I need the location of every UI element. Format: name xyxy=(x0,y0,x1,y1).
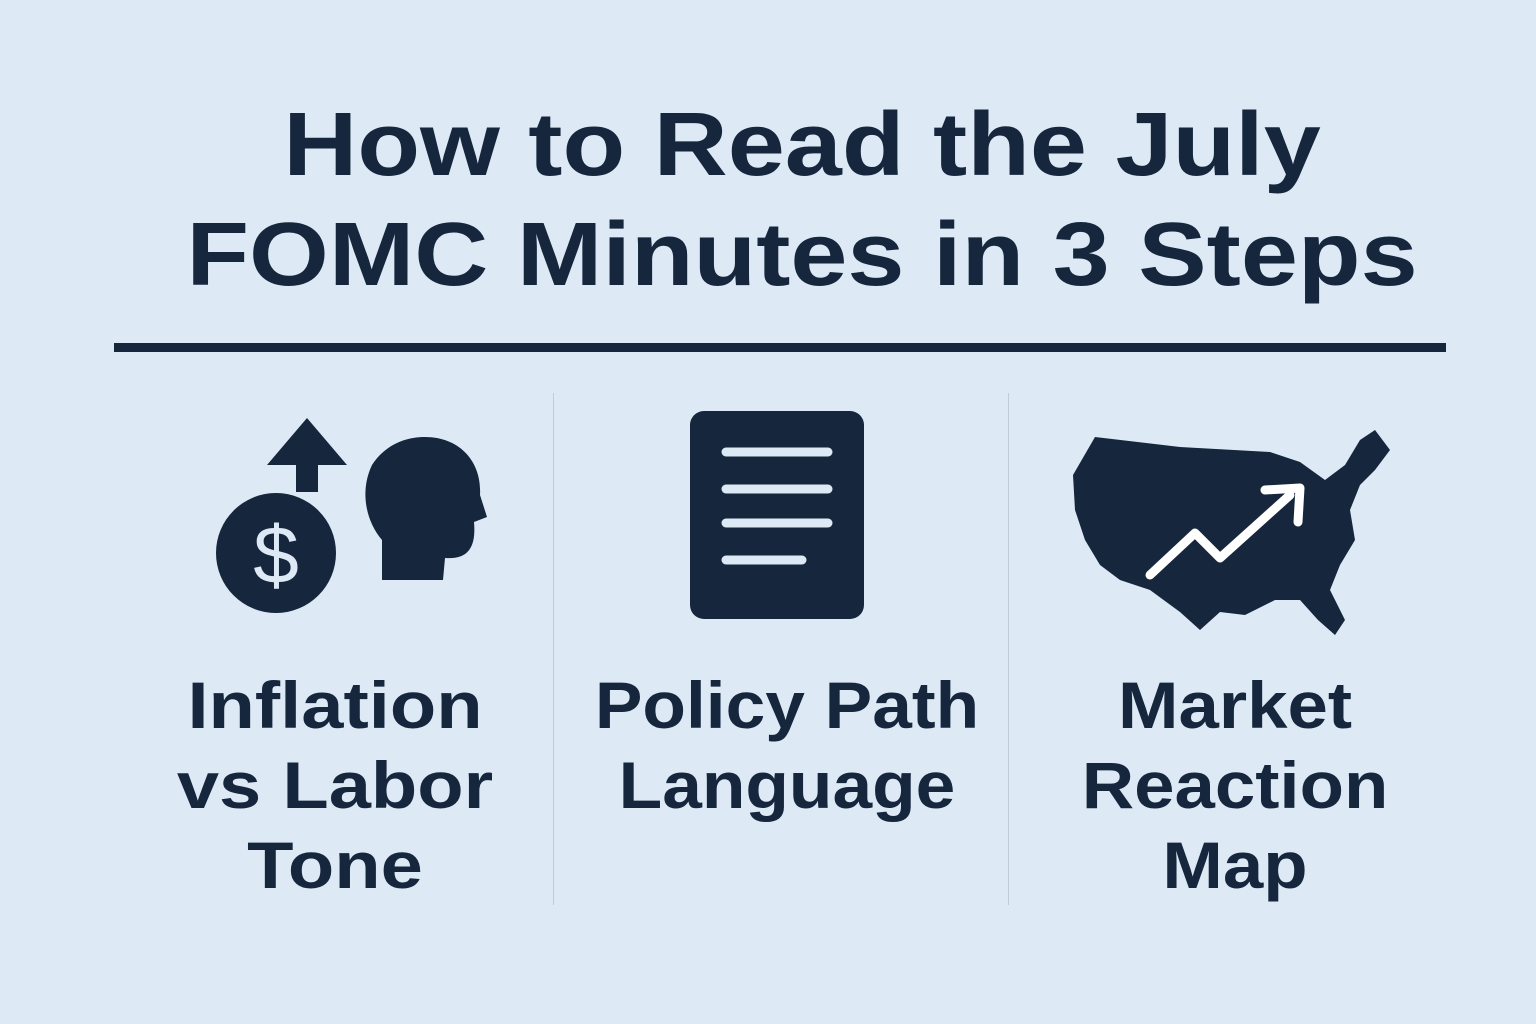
icon: dollar coin, up arrow and head: $ xyxy=(253,510,299,601)
label: Inflation xyxy=(187,668,483,742)
icon: US map with trend arrow xyxy=(1073,430,1390,635)
panel: step 3 xyxy=(1073,430,1390,902)
label: Reaction xyxy=(1082,748,1388,822)
label: vs Labor xyxy=(177,748,493,822)
icon: document xyxy=(690,411,864,619)
panel: step 2 xyxy=(595,411,979,822)
title xyxy=(186,95,1418,305)
label: Market xyxy=(1118,668,1352,742)
label: Map xyxy=(1162,828,1308,902)
label: Policy Path xyxy=(595,668,979,742)
label xyxy=(177,668,493,902)
label xyxy=(1082,668,1388,902)
label: Language xyxy=(619,748,955,822)
icon: dollar coin, up arrow and head xyxy=(216,418,487,613)
panel: step 1 xyxy=(177,418,493,902)
title: How to Read the July xyxy=(283,95,1321,195)
label xyxy=(595,668,979,822)
title: FOMC Minutes in 3 Steps xyxy=(186,205,1418,305)
label: Tone xyxy=(247,828,423,902)
title divider xyxy=(114,343,1446,352)
